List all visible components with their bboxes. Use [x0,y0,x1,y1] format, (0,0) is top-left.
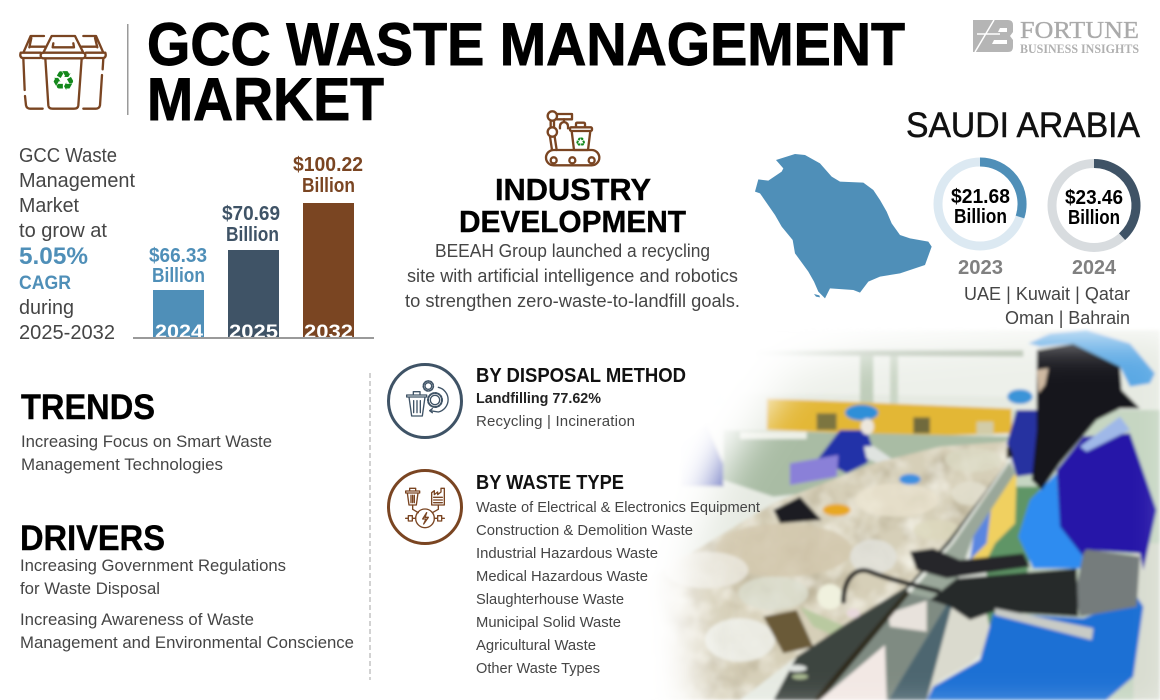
panel: trends: Management Technologies [21,455,223,474]
map: Saudi Arabia [755,154,932,298]
panel: trends: Increasing Focus on Smart Waste [21,432,272,451]
title [147,11,905,133]
donut chart: 2023: 2023 [958,257,1003,279]
text: by disposal method: Landfilling 77.62% [476,390,601,407]
icon: robotic arm and conveyor: ♻ [575,135,586,149]
text: other GCC countries [964,284,1130,328]
text: other GCC countries: Oman | Bahrain [1005,308,1130,328]
bar chart: market size [133,154,374,343]
conveyor belt [773,463,1007,700]
text: industry development detail [405,241,740,311]
donut chart: 2024: 2024 [1072,257,1117,279]
text: by waste type: Waste of Electrical & Electronics Equipment [476,499,761,516]
text: industry development detail: BEEAH Group launched a recycling [435,241,710,261]
text: market growth statement: Market [19,195,79,217]
text: by waste type: Municipal Solid Waste [476,614,621,631]
heading: Saudi Arabia: SAUDI ARABIA [906,106,1141,145]
bar 2024: $66.33 [149,245,207,267]
panel: drivers [20,519,354,652]
text: by waste type: Industrial Hazardous Waste [476,545,658,562]
icon: recycling bins [20,36,106,109]
bar 2025 [222,203,280,343]
front worker gloves and pipe [910,548,1030,578]
text: by waste type: Other Waste Types [476,660,600,677]
donut chart: 2023: $21.68 [951,186,1010,208]
text: market growth statement [19,145,135,344]
bar 2032 [293,154,363,343]
waste pile [640,442,1007,700]
panel: drivers: Increasing Government Regulations [20,556,286,575]
middle worker [818,430,873,473]
text: by waste type: Construction & Demolition Waste [476,522,693,539]
text: by disposal method: BY DISPOSAL METHOD [476,365,686,387]
bar 2024 [149,245,207,343]
back worker [1007,410,1045,477]
icon: disposal method [388,364,462,438]
text: market growth statement: GCC Waste [19,145,117,167]
donut chart: 2023 [938,162,1022,279]
heading: industry development: DEVELOPMENT [459,204,686,239]
text: market growth statement: 5.05% [19,243,88,270]
text: market growth statement: Management [19,170,135,192]
logo: Fortune Business Insights: BUSINESS INSIGHTS [1020,42,1139,56]
logo: Fortune Business Insights [973,18,1139,56]
text: by disposal method: Recycling | Incineration [476,413,635,430]
bar 2024: 2024 [155,322,203,343]
front worker head cover [1032,343,1140,490]
bar 2024: Billion [152,265,205,287]
bar 2025: 2025 [229,322,278,343]
text: market growth statement: 2025-2032 [19,322,115,344]
text: market growth statement: CAGR [19,273,71,294]
donut chart: 2023: Billion [954,206,1007,228]
bar 2025: Billion [226,224,279,246]
donut chart: 2024: $23.46 [1065,187,1123,209]
text: market growth statement: during [19,297,74,319]
bar 2032: Billion [302,175,355,197]
panel: drivers: Increasing Awareness of Waste [20,610,254,629]
bar 2032: 2032 [304,322,353,343]
text: by waste type [476,472,761,677]
text: industry development detail: to strengthen zero-waste-to-landfill goals. [405,291,740,311]
panel: drivers: Management and Environmental Conscience [20,633,354,652]
front worker apron [927,597,1143,700]
bar 2032: $100.22 [293,154,363,176]
icon: waste type [388,470,462,544]
title: GCC WASTE MANAGEMENT [147,11,905,78]
donut chart: 2024: Billion [1068,207,1120,229]
title: MARKET [147,66,384,133]
heading: industry development: INDUSTRY [495,172,651,207]
text: by disposal method [476,365,686,430]
title divider [127,24,128,115]
text: by waste type: BY WASTE TYPE [476,472,624,494]
text: market growth statement: to grow at [19,220,107,242]
text: by waste type: Medical Hazardous Waste [476,568,648,585]
panel: trends: TRENDS [21,388,155,427]
logo: Fortune Business Insights: FORTUNE [1020,18,1139,44]
panel: drivers: DRIVERS [20,519,165,558]
heading: industry development [459,172,686,239]
text: industry development detail: site with artificial intelligence and robotics [407,266,738,286]
text: other GCC countries: UAE | Kuwait | Qatar [964,284,1130,304]
icon: robotic arm and conveyor [546,111,599,165]
ghost worker [683,380,723,410]
donut chart: 2024 [1052,164,1136,279]
panel: trends [21,388,272,474]
photo: workers sorting waste on a conveyor [640,330,1160,700]
panel: drivers: for Waste Disposal [20,579,160,598]
icon: recycling bins: ♻ [51,66,75,97]
text: by waste type: Slaughterhouse Waste [476,591,624,608]
text: by waste type: Agricultural Waste [476,637,596,654]
bar 2025: $70.69 [222,203,280,225]
